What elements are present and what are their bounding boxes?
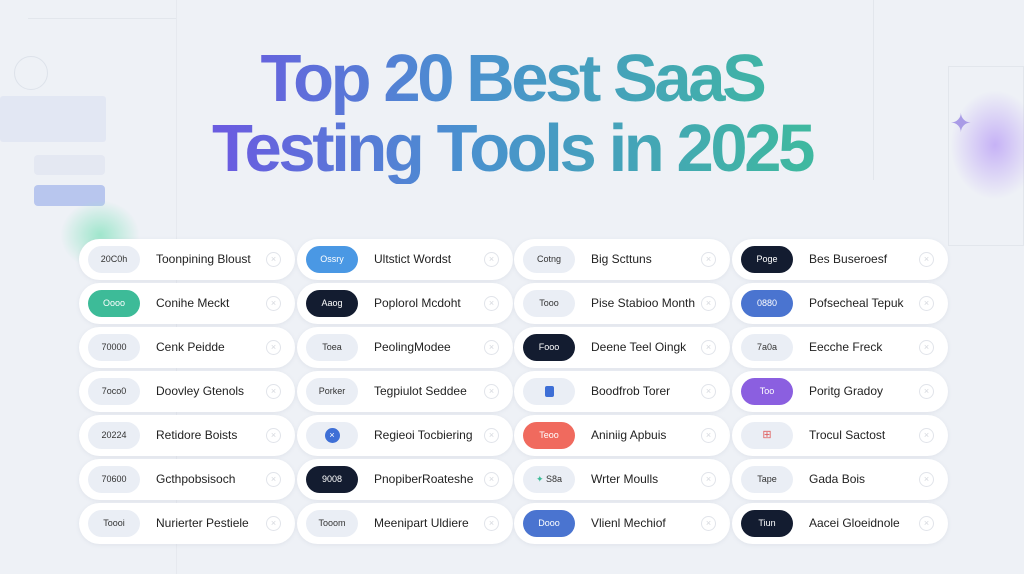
- tools grid: Poge: [756, 254, 778, 264]
- tools grid: ×: [706, 342, 711, 352]
- tools grid: Poplorol Mcdoht: [374, 296, 461, 310]
- tools grid: Eecche Freck: [809, 340, 882, 354]
- tools grid: [79, 239, 948, 544]
- tools grid: ×: [271, 474, 276, 484]
- tools grid: 0880: [757, 298, 777, 308]
- tools grid: Retidore Boists: [156, 428, 237, 442]
- title: Top 20 Best SaaS: [261, 41, 763, 116]
- tools grid: 70000: [101, 342, 127, 352]
- tools grid: Wrter Moulls: [591, 472, 658, 486]
- tools grid: Tooo: [539, 298, 559, 308]
- tools grid: Conihe Meckt: [156, 296, 229, 310]
- tools grid: ×: [489, 518, 494, 528]
- tools grid: ×: [924, 430, 929, 440]
- tools grid: Deene Teel Oingk: [591, 340, 686, 354]
- tools grid: Teoo: [539, 430, 559, 440]
- tools grid: Big Scttuns: [591, 252, 652, 266]
- tools grid: Tiun: [758, 518, 776, 528]
- tools grid: Ossry: [320, 254, 344, 264]
- tools grid: ×: [706, 518, 711, 528]
- tools grid: ×: [489, 474, 494, 484]
- tools grid: ×: [924, 342, 929, 352]
- tools grid: Nurierter Pestiele: [156, 516, 249, 530]
- tools grid: Gcthpobsisoch: [156, 472, 235, 486]
- tools grid: ×: [271, 430, 276, 440]
- tools grid: ×: [489, 386, 494, 396]
- tools grid: ×: [924, 254, 929, 264]
- tools grid: 7a0a: [757, 342, 777, 352]
- tools grid: Toonpining Bloust: [156, 252, 251, 266]
- tools grid: ×: [271, 342, 276, 352]
- tools grid: ×: [489, 430, 494, 440]
- tools grid: Tegpiulot Seddee: [374, 384, 467, 398]
- tools grid: 9008: [322, 474, 342, 484]
- tools grid: Aniniig Apbuis: [591, 428, 666, 442]
- text: ✦: [950, 108, 972, 138]
- title: Testing Tools in 2025: [212, 111, 812, 186]
- tools grid: ×: [924, 386, 929, 396]
- tools grid: Aacei Gloeidnole: [809, 516, 900, 530]
- tools grid: Poritg Gradoy: [809, 384, 883, 398]
- tools grid: ×: [271, 386, 276, 396]
- tools grid: Regieoi Tocbiering: [374, 428, 473, 442]
- tools grid: ×: [924, 474, 929, 484]
- tools grid: Gada Bois: [809, 472, 865, 486]
- tools grid: Cotng: [537, 254, 561, 264]
- tools grid: Doovley Gtenols: [156, 384, 244, 398]
- tools grid: ×: [924, 298, 929, 308]
- tools grid: ×: [329, 430, 335, 440]
- tools grid: Oooo: [103, 298, 125, 308]
- column 4: [732, 239, 948, 544]
- tools grid: Aaog: [321, 298, 343, 308]
- tools grid: ×: [271, 254, 276, 264]
- column 2: [297, 239, 513, 544]
- tools grid: 20C0h: [101, 254, 127, 264]
- tools grid: Trocul Sactost: [809, 428, 885, 442]
- tools grid: Boodfrob Torer: [591, 384, 670, 398]
- tools grid: Meenipart Uldiere: [374, 516, 469, 530]
- tools grid: Tooom: [318, 518, 346, 528]
- tools grid: Pofsecheal Tepuk: [809, 296, 904, 310]
- column 1: [79, 239, 295, 544]
- column 3: [514, 239, 730, 544]
- tools grid: ×: [706, 254, 711, 264]
- tools grid: ×: [489, 254, 494, 264]
- tools grid: ×: [706, 386, 711, 396]
- tools grid: ×: [271, 518, 276, 528]
- tools grid: 20224: [101, 430, 127, 440]
- tools grid: ×: [924, 518, 929, 528]
- tools grid: ×: [489, 298, 494, 308]
- tools grid: Vlienl Mechiof: [591, 516, 666, 530]
- tools grid: PeolingModee: [374, 340, 451, 354]
- tools grid: Ultstict Wordst: [374, 252, 451, 266]
- tools grid: Cenk Peidde: [156, 340, 225, 354]
- tools grid: ×: [706, 474, 711, 484]
- tools grid: Pise Stabioo Month: [591, 296, 695, 310]
- title: [0, 44, 1024, 184]
- tools grid: 7oco0: [102, 386, 126, 396]
- tools grid: Tape: [757, 474, 777, 484]
- tools grid: 70600: [101, 474, 127, 484]
- tools grid: ×: [271, 298, 276, 308]
- tools grid: PnopiberRoateshe: [374, 472, 473, 486]
- tools grid: ✦ S8a: [536, 474, 562, 484]
- tools grid: ⊞: [762, 429, 772, 441]
- tools grid: ×: [706, 430, 711, 440]
- tools grid: Toooi: [103, 518, 125, 528]
- tools grid: Toea: [322, 342, 342, 352]
- tools grid: ×: [706, 298, 711, 308]
- tools grid: Porker: [319, 386, 345, 396]
- tools grid: Fooo: [539, 342, 559, 352]
- tools grid: Bes Buseroesf: [809, 252, 887, 266]
- tools grid: ×: [489, 342, 494, 352]
- tools grid: Dooo: [538, 518, 560, 528]
- tools grid: Too: [760, 386, 774, 396]
